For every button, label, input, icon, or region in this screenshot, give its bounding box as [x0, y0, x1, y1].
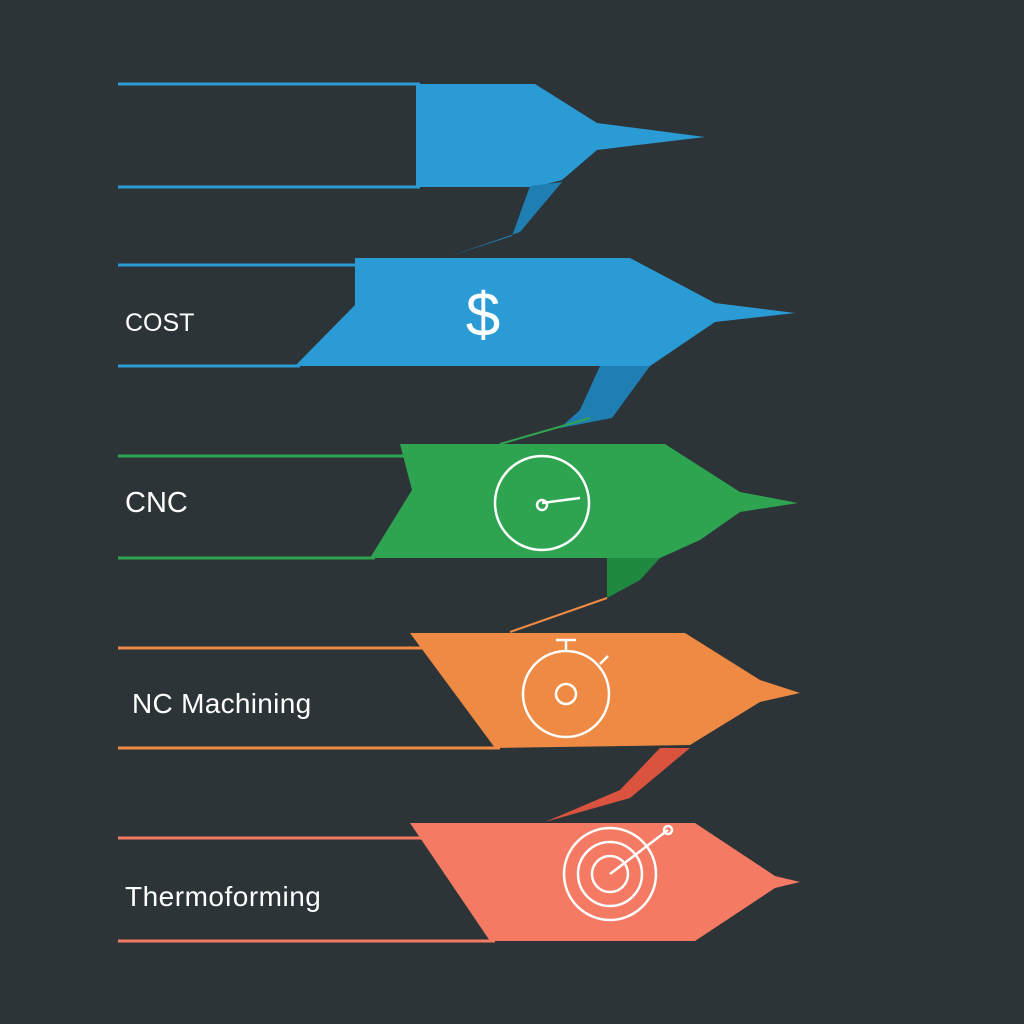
label: Thermoforming: Thermoforming [125, 881, 321, 912]
icon: gauge [495, 456, 589, 550]
row 5: Thermoforming arrow [118, 823, 800, 941]
row 2: cost arrow [118, 258, 795, 444]
row 3: CNC arrow [118, 444, 798, 632]
icon: stopwatch [523, 640, 609, 737]
row 4: NC Machining arrow [118, 633, 800, 822]
label: COST: COST [125, 309, 194, 337]
label: NC Machining: NC Machining [132, 688, 311, 719]
row 1: blue arrow [118, 84, 705, 256]
icon: target [564, 826, 672, 920]
icon: dollar: $ [466, 281, 500, 350]
label: CNC: CNC [125, 487, 188, 519]
